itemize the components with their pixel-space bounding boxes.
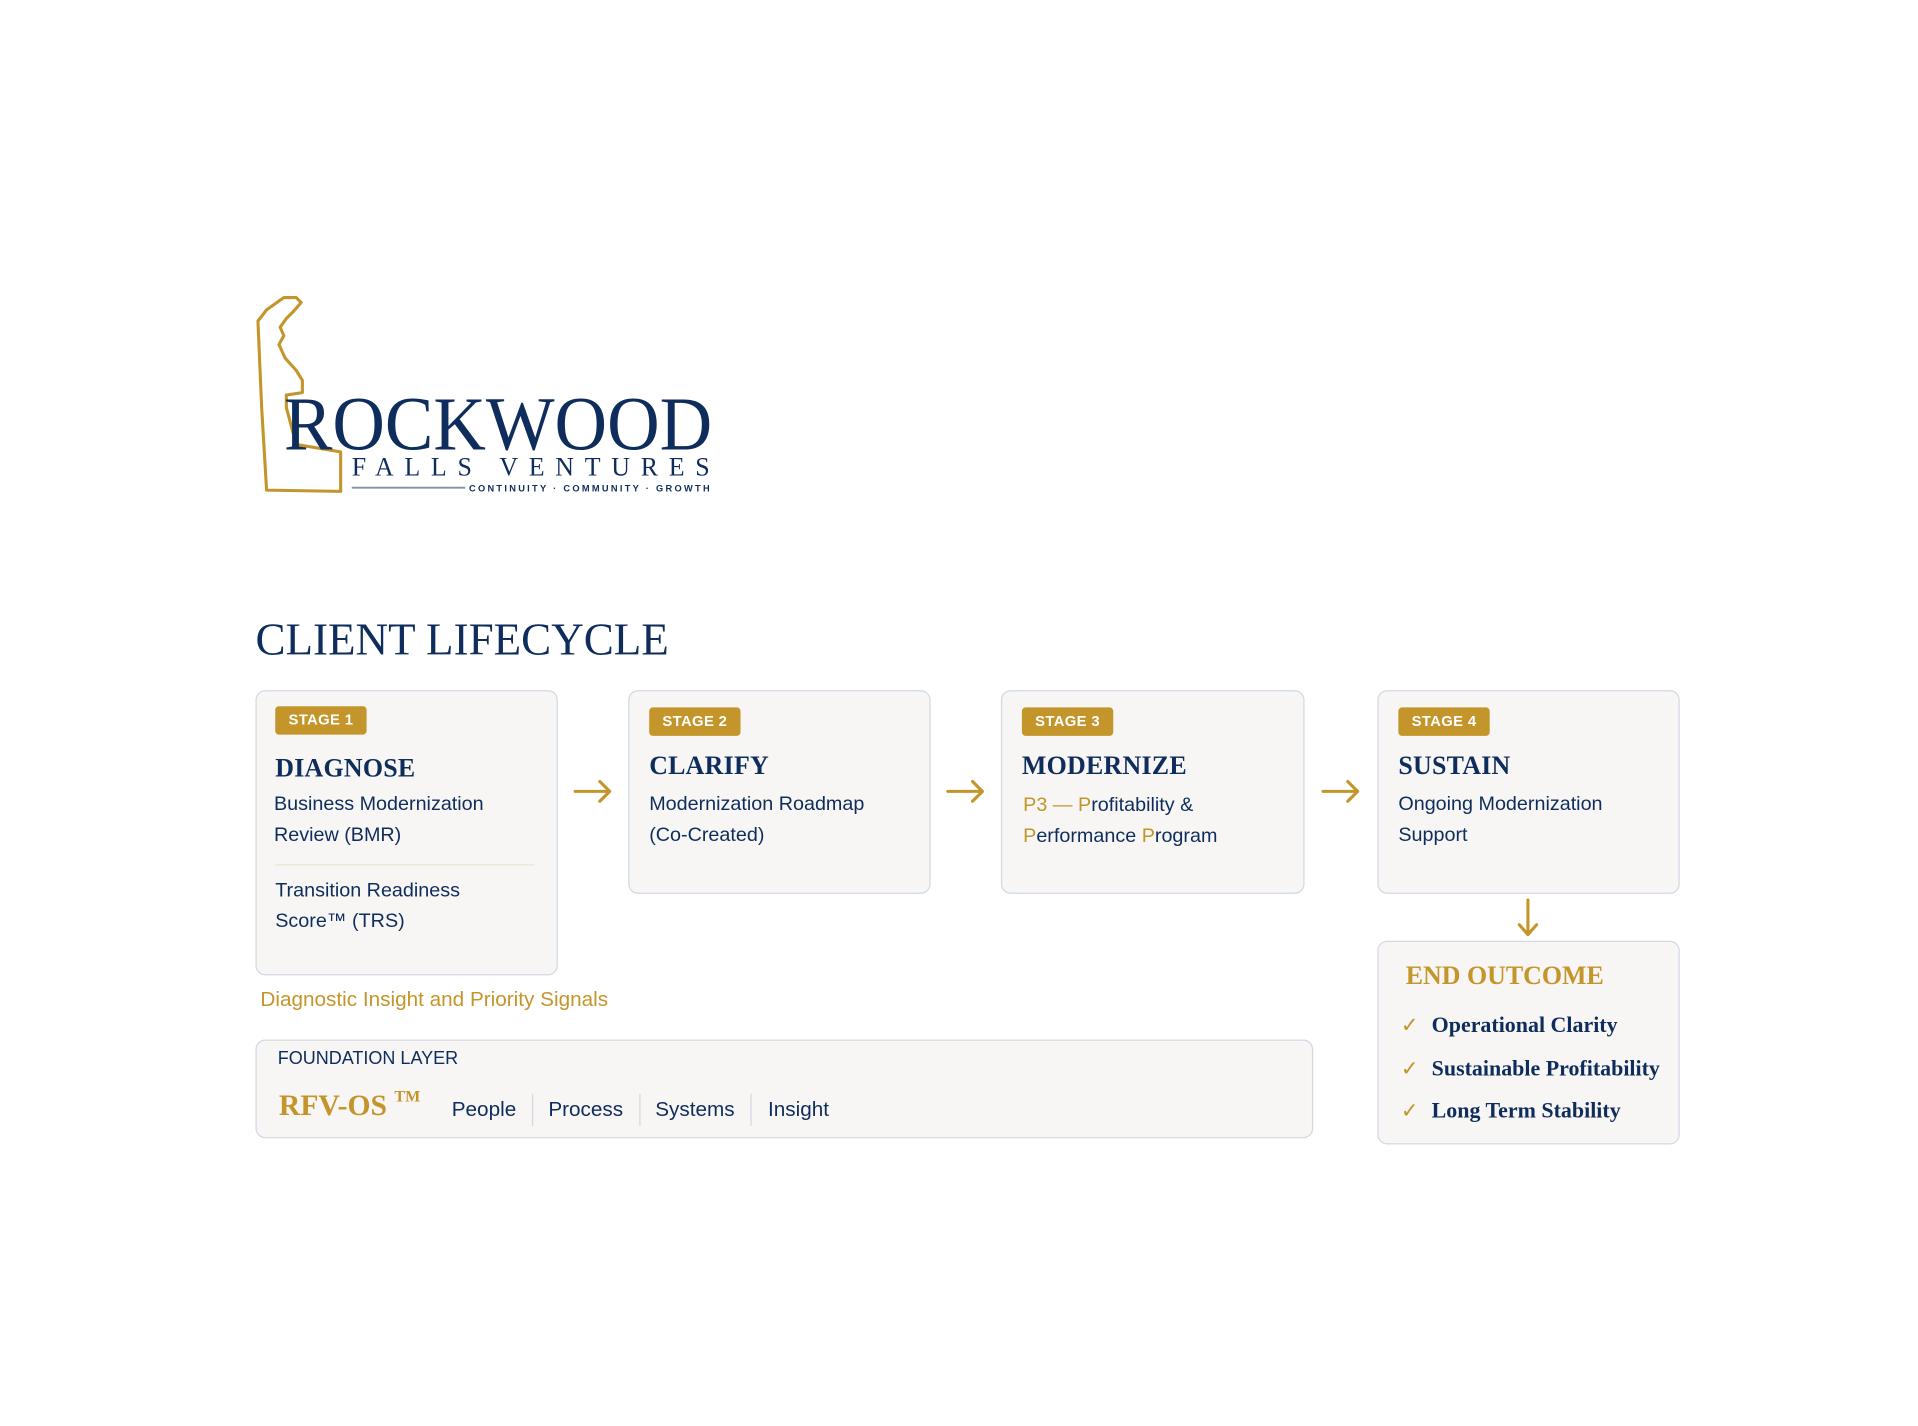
text trs	[275, 880, 460, 932]
heading clarify: CLARIFY	[649, 751, 769, 780]
logo text: CONTINUITY · COMMUNITY · GROWTH	[469, 483, 710, 493]
pillars: Systems	[655, 1098, 735, 1121]
panel: end outcome	[1377, 941, 1680, 1144]
text ongoing	[1398, 794, 1603, 846]
icon: state outline	[258, 298, 341, 491]
arrow 3	[1322, 780, 1360, 803]
text ongoing: Ongoing Modernization	[1398, 794, 1603, 815]
pillars	[452, 1094, 829, 1126]
text p3: P3 — Profitability &	[1023, 795, 1193, 816]
panel: stage 3	[1001, 690, 1305, 894]
logo	[256, 296, 712, 493]
panel: stage 4	[1377, 690, 1680, 894]
outcome list	[1401, 1012, 1660, 1123]
logo text: ROCKWOOD	[284, 381, 712, 466]
caption diagnostic insight: Diagnostic Insight and Priority Signals	[260, 988, 608, 1011]
arrow down	[1518, 898, 1538, 936]
badge stage 3	[1022, 707, 1113, 736]
outcome list: Long Term Stability	[1432, 1098, 1621, 1122]
rfv-os: RFV-OS TM	[279, 1086, 420, 1122]
badge stage 2	[649, 707, 741, 736]
text roadmap: (Co-Created)	[649, 825, 764, 846]
pillars: Insight	[768, 1098, 829, 1121]
arrow 1	[574, 780, 612, 803]
text bmr	[274, 794, 484, 846]
outcome list: ✓	[1401, 1014, 1418, 1038]
text p3: Performance Program	[1023, 826, 1217, 847]
text roadmap: Modernization Roadmap	[649, 794, 864, 815]
badge stage 1	[275, 706, 367, 735]
text roadmap	[649, 794, 864, 846]
heading end outcome: END OUTCOME	[1406, 961, 1604, 990]
badge stage 2: STAGE 2	[662, 712, 727, 730]
outcome list: ✓	[1401, 1099, 1418, 1123]
outcome list: Sustainable Profitability	[1432, 1055, 1660, 1080]
panel: stage 1	[255, 690, 558, 975]
logo text: FALLS VENTURES	[352, 452, 710, 481]
text trs: Transition Readiness	[275, 880, 460, 901]
heading diagnose: DIAGNOSE	[275, 753, 415, 783]
text p3	[1023, 795, 1217, 847]
badge stage 4	[1398, 707, 1490, 736]
heading sustain: SUSTAIN	[1398, 751, 1511, 780]
outcome list: ✓	[1401, 1056, 1418, 1081]
badge stage 1: STAGE 1	[288, 711, 353, 728]
text ongoing: Support	[1398, 825, 1468, 846]
text bmr: Business Modernization	[274, 794, 484, 815]
heading modernize: MODERNIZE	[1022, 751, 1187, 780]
text bmr: Review (BMR)	[274, 825, 401, 846]
pillars: People	[452, 1098, 516, 1121]
text trs: Score™ (TRS)	[275, 911, 405, 932]
badge stage 3: STAGE 3	[1035, 712, 1100, 730]
badge stage 4: STAGE 4	[1412, 712, 1476, 730]
arrow 2	[946, 780, 984, 803]
panel: foundation layer	[255, 1040, 1313, 1138]
panel: stage 2	[628, 690, 931, 894]
label foundation: FOUNDATION LAYER	[278, 1049, 458, 1069]
outcome list: Operational Clarity	[1432, 1012, 1618, 1037]
title: CLIENT LIFECYCLE	[255, 614, 669, 664]
pillars: Process	[548, 1098, 623, 1121]
